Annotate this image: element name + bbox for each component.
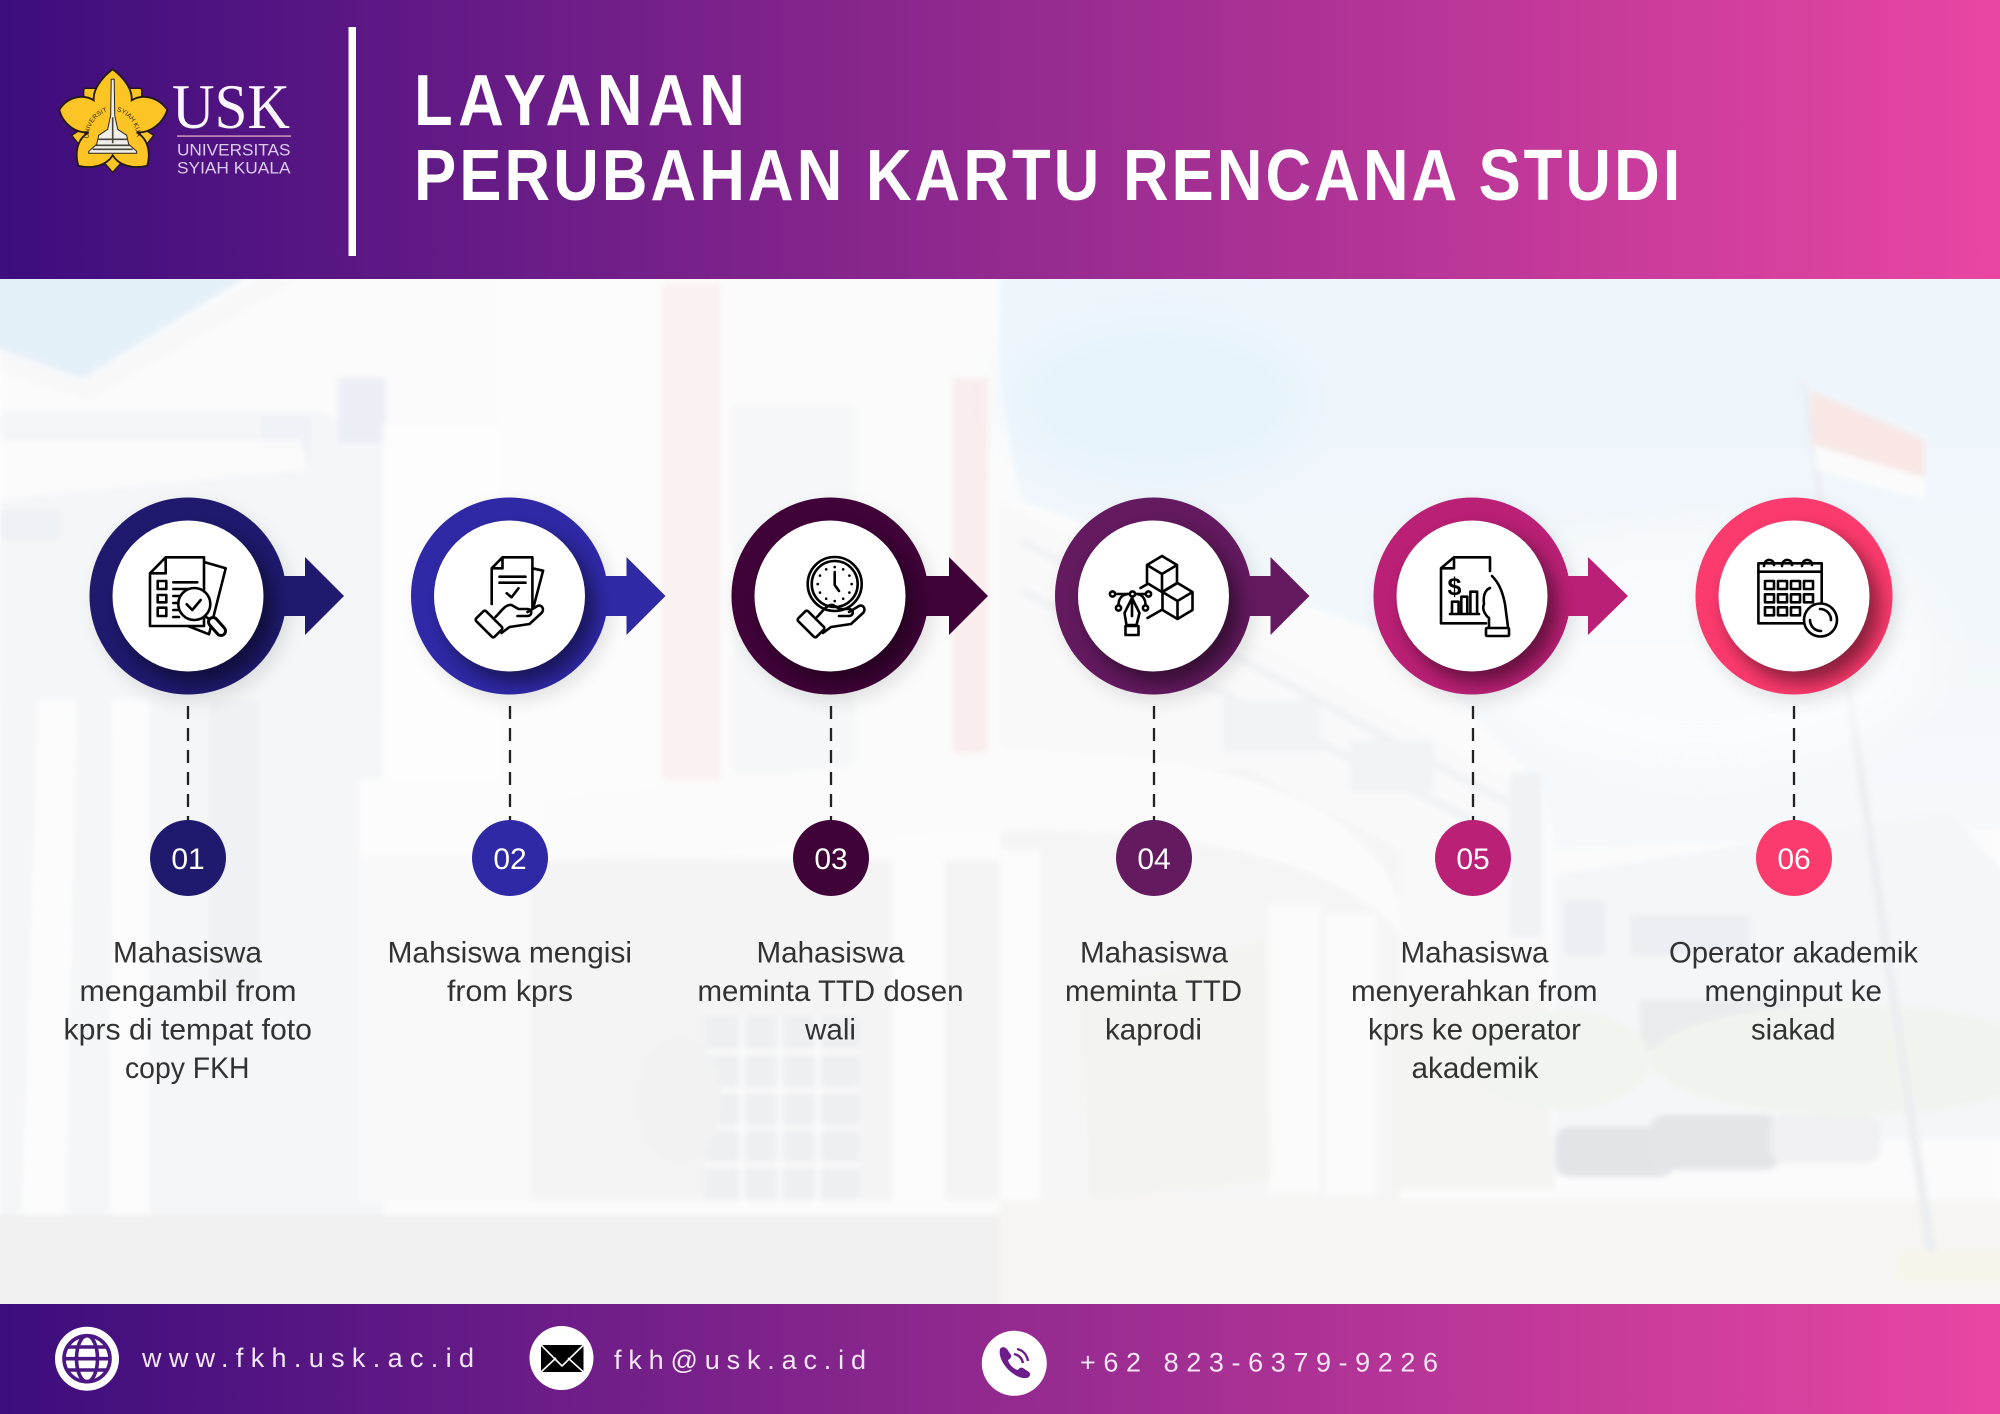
logo: USK flower emblem: UNIVERSITAS — [84, 107, 106, 138]
step 5 node: arrow and ring with financial report icon — [1374, 498, 1628, 702]
icon: globe — [55, 1327, 119, 1391]
step 2 node: arrow and ring with hand-holding-document icon — [411, 498, 666, 702]
logo wordmark: USK — [172, 72, 290, 142]
icon: cubes and pen tool — [1110, 556, 1192, 635]
step 4 text: Mahasiswa — [1080, 936, 1228, 970]
step 1 text: Mahasiswa — [113, 936, 262, 970]
number badge 03: 03 — [814, 843, 848, 876]
number badge 01 — [150, 820, 226, 896]
title: LAYANAN — [414, 61, 745, 141]
step 1 text — [64, 936, 312, 1085]
number badge 04 — [1116, 820, 1192, 896]
step 5 text — [1351, 936, 1598, 1085]
step 3 text: wali — [804, 1014, 856, 1046]
number badge 01: 01 — [171, 843, 205, 876]
number badge 03 — [793, 820, 869, 896]
header band — [0, 0, 2000, 279]
step 4 text — [1065, 936, 1242, 1046]
number badge 06 — [1756, 820, 1832, 896]
logo wordmark: SYIAH KUALA — [177, 159, 290, 177]
icon: hand holding clock — [797, 557, 864, 638]
email: fkh@usk.ac.id — [614, 1345, 866, 1375]
step 2 text: from kprs — [447, 975, 573, 1008]
step 1 text: mengambil from — [80, 975, 296, 1008]
step 4 text: kaprodi — [1105, 1014, 1202, 1046]
phone number: +62 823-6379-9226 — [1080, 1348, 1438, 1378]
title: PERUBAHAN KARTU RENCANA STUDI — [414, 136, 1680, 216]
step 3 text: meminta TTD dosen — [698, 975, 964, 1008]
step 5 text: akademik — [1412, 1052, 1539, 1085]
step 1 node: arrow and ring with document-check icon — [90, 498, 344, 702]
step 1 text: copy FKH — [125, 1052, 250, 1085]
icon: report held by hand — [1441, 557, 1509, 636]
step 2 text: Mahsiswa mengisi — [388, 936, 632, 970]
number badge 02 — [472, 820, 548, 896]
header divider — [348, 27, 356, 256]
background photo: faded campus building — [0, 270, 2000, 1320]
number badge 05: 05 — [1456, 843, 1490, 876]
step 6 text: siakad — [1751, 1014, 1836, 1046]
connector dashes — [188, 706, 1794, 822]
step 3 text: Mahasiswa — [756, 936, 905, 970]
step 6 text — [1669, 936, 1919, 1046]
step 6 text: Operator akademik — [1669, 936, 1919, 970]
icon: phone — [982, 1331, 1047, 1396]
step 5 text: kprs ke operator — [1368, 1014, 1581, 1046]
number badge 05 — [1435, 820, 1511, 896]
number badge 04: 04 — [1137, 843, 1171, 876]
title — [414, 61, 1680, 216]
step 5 node: arrow and ring with financial report icon: $ — [1448, 573, 1462, 601]
logo wordmark: UNIVERSITAS — [177, 142, 290, 160]
step 6 node: ring with calendar refresh icon — [1696, 498, 1898, 702]
step 4 node: arrow and ring with cubes and pen-tool icon — [1055, 498, 1310, 702]
step 1 text: kprs di tempat foto — [64, 1014, 312, 1046]
logo: USK flower emblem — [58, 68, 168, 174]
icon: hand holding document — [475, 557, 543, 638]
step 3 node: arrow and ring with hand-holding-clock icon — [732, 498, 988, 702]
step 5 text: Mahasiswa — [1400, 936, 1549, 970]
step 3 text — [698, 936, 964, 1046]
step 2 text — [388, 936, 632, 1008]
logo wordmark — [172, 72, 291, 177]
number badge 06: 06 — [1777, 843, 1811, 876]
step 5 text: menyerahkan from — [1351, 975, 1598, 1008]
number badge 02: 02 — [493, 843, 527, 876]
step 6 text: menginput ke — [1704, 975, 1882, 1008]
step 4 text: meminta TTD — [1065, 975, 1242, 1008]
website: www.fkh.usk.ac.id — [141, 1343, 474, 1373]
icon: calendar with refresh — [1758, 560, 1837, 636]
footer band — [0, 1304, 2000, 1414]
icon: document with magnifier — [150, 557, 226, 634]
icon: envelope — [530, 1326, 594, 1390]
logo: USK flower emblem: SYIAH KUALA — [117, 107, 142, 137]
